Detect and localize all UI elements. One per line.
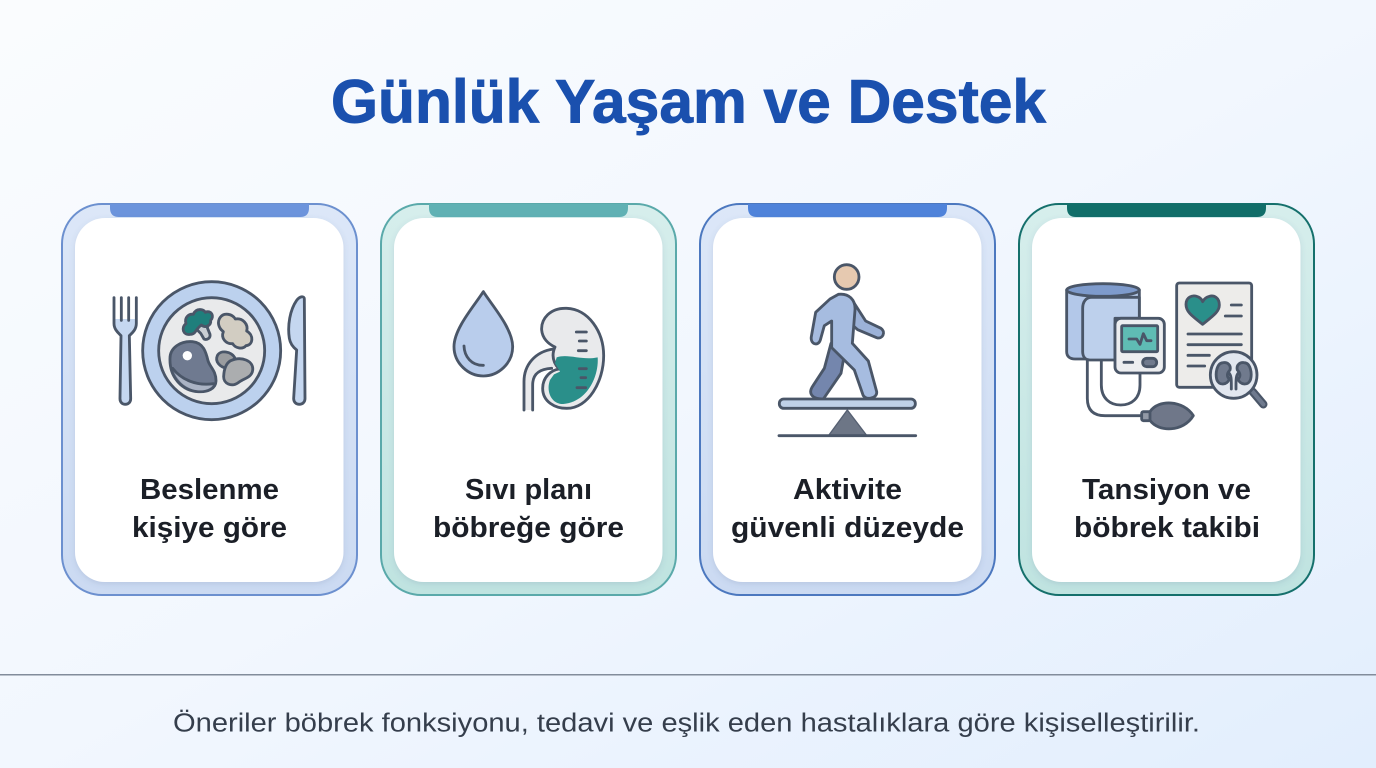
label <box>132 474 287 544</box>
steak <box>170 342 216 392</box>
mushrooms <box>217 352 253 385</box>
card inner surface <box>713 218 982 582</box>
plate centre <box>159 298 265 404</box>
card top tab <box>748 204 947 217</box>
card top tab <box>429 204 628 217</box>
label: kişiye göre <box>132 512 287 544</box>
fork <box>114 298 136 404</box>
label <box>731 474 964 544</box>
kidney <box>524 308 604 410</box>
monitor <box>1115 318 1164 373</box>
report document <box>1177 283 1252 387</box>
back leg <box>811 343 844 399</box>
cuff <box>1067 284 1139 360</box>
label: Beslenme <box>140 474 279 506</box>
icon: water drop and kidney <box>454 292 604 410</box>
ground line <box>779 431 916 440</box>
label: güvenli düzeyde <box>731 512 964 544</box>
steak bone <box>183 351 192 360</box>
card top tab <box>110 204 309 217</box>
panel: sıvı planı <box>381 204 676 595</box>
tubes <box>1087 360 1142 416</box>
card inner surface <box>1032 218 1300 582</box>
icon: plate with food, fork and knife <box>114 282 305 420</box>
panel: beslenme <box>62 204 357 595</box>
icon: blood pressure monitor and kidney report <box>1067 283 1263 429</box>
label: Sıvı planı <box>465 474 592 506</box>
label: Tansiyon ve <box>1082 474 1251 506</box>
pump bulb <box>1142 403 1193 429</box>
magnifier with kidneys <box>1210 352 1263 404</box>
card frame <box>381 204 676 595</box>
cauliflower <box>218 314 252 348</box>
fulcrum <box>829 410 866 435</box>
panel: tansiyon ve böbrek takibi <box>1019 204 1314 595</box>
card top tab <box>1067 204 1266 217</box>
footer note: Öneriler böbrek fonksiyonu, tedavi ve eşlik eden hastalıklara göre kişiselleştirilir. <box>173 710 1200 738</box>
label <box>1074 474 1260 544</box>
head <box>834 265 859 289</box>
knife <box>289 297 305 404</box>
broccoli <box>183 310 212 339</box>
label: Aktivite <box>793 474 902 506</box>
label: böbrek takibi <box>1074 512 1260 544</box>
card frame <box>1019 204 1314 595</box>
water drop <box>454 292 513 376</box>
title: Günlük Yaşam ve Destek <box>331 68 1046 136</box>
label <box>433 474 624 544</box>
footer divider <box>0 674 1376 676</box>
icon: person walking on balance board <box>779 265 916 436</box>
torso and front leg <box>811 294 877 398</box>
panel: aktivite <box>700 204 995 595</box>
card frame <box>700 204 995 595</box>
balance board <box>779 399 915 408</box>
card inner surface <box>75 218 344 582</box>
label: böbreğe göre <box>433 512 624 544</box>
card frame <box>62 204 357 595</box>
plate rim <box>143 282 281 420</box>
back arm <box>850 303 884 338</box>
card inner surface <box>394 218 662 582</box>
